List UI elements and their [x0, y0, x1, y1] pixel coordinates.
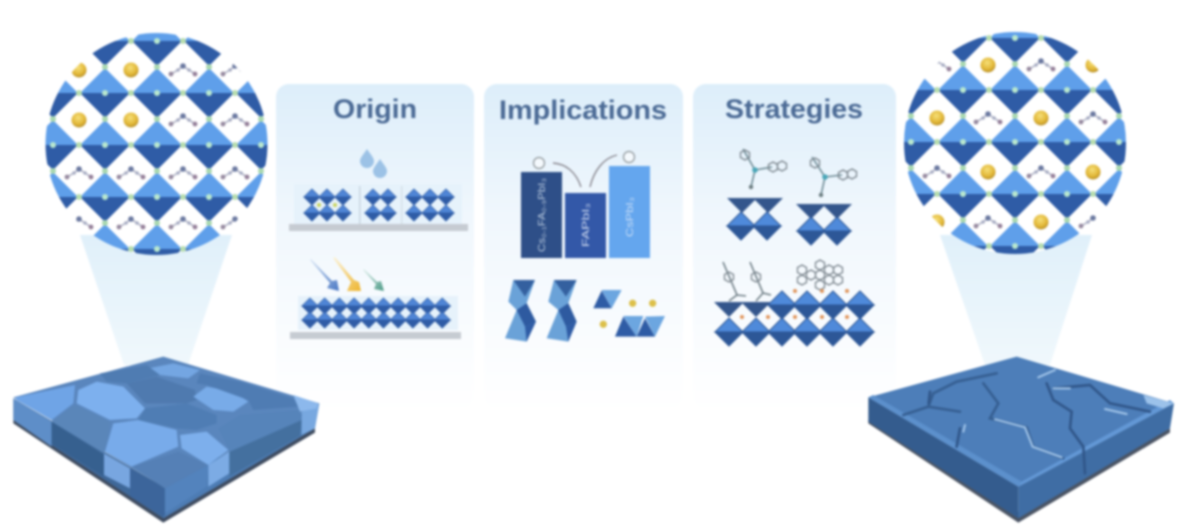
arrow: blue light [310, 259, 339, 291]
film cracks [903, 370, 1150, 473]
magnifier: right crystal lattice [900, 28, 1130, 258]
tile: left polycrystalline film [13, 357, 319, 523]
diagram: cracked film under moisture [289, 184, 468, 231]
diagram: passivated lattice [714, 260, 874, 346]
diagram: film under irradiation [290, 296, 461, 339]
bar chart: energy levels: FAPbI₃ [581, 203, 592, 247]
bar chart: energy levels: Cs₀.₁FA₀.₉PbI₃ [537, 178, 548, 252]
arrow: electron transfer [553, 155, 617, 187]
beam: right magnifier [940, 235, 1092, 365]
panel: strategies [693, 84, 896, 412]
diagram: distorted octahedra [505, 280, 665, 342]
icon: electron right [624, 152, 634, 162]
caesium and FA ions, right [923, 58, 1107, 230]
panel: implications [484, 84, 683, 412]
arrow: green light [363, 269, 384, 291]
tile: right compact film [868, 357, 1174, 523]
magnifier: left crystal lattice [40, 30, 275, 260]
heading: implications: Implications [499, 95, 667, 125]
icon: water droplets [360, 149, 387, 178]
panel: origin [276, 84, 474, 412]
diagram: molecule on octahedra, right [796, 157, 856, 245]
arrow: yellow light [333, 257, 361, 291]
heading: strategies: Strategies [725, 94, 863, 124]
bar chart: energy levels [521, 166, 650, 258]
bar chart: energy levels: CsPbI₃ [625, 197, 636, 237]
icon: electron left [534, 158, 544, 168]
diagram: molecule on octahedra, left [727, 149, 786, 240]
caesium and FA ions, left [65, 62, 249, 229]
beam: left magnifier [80, 235, 232, 365]
heading: origin: Origin [333, 94, 417, 124]
